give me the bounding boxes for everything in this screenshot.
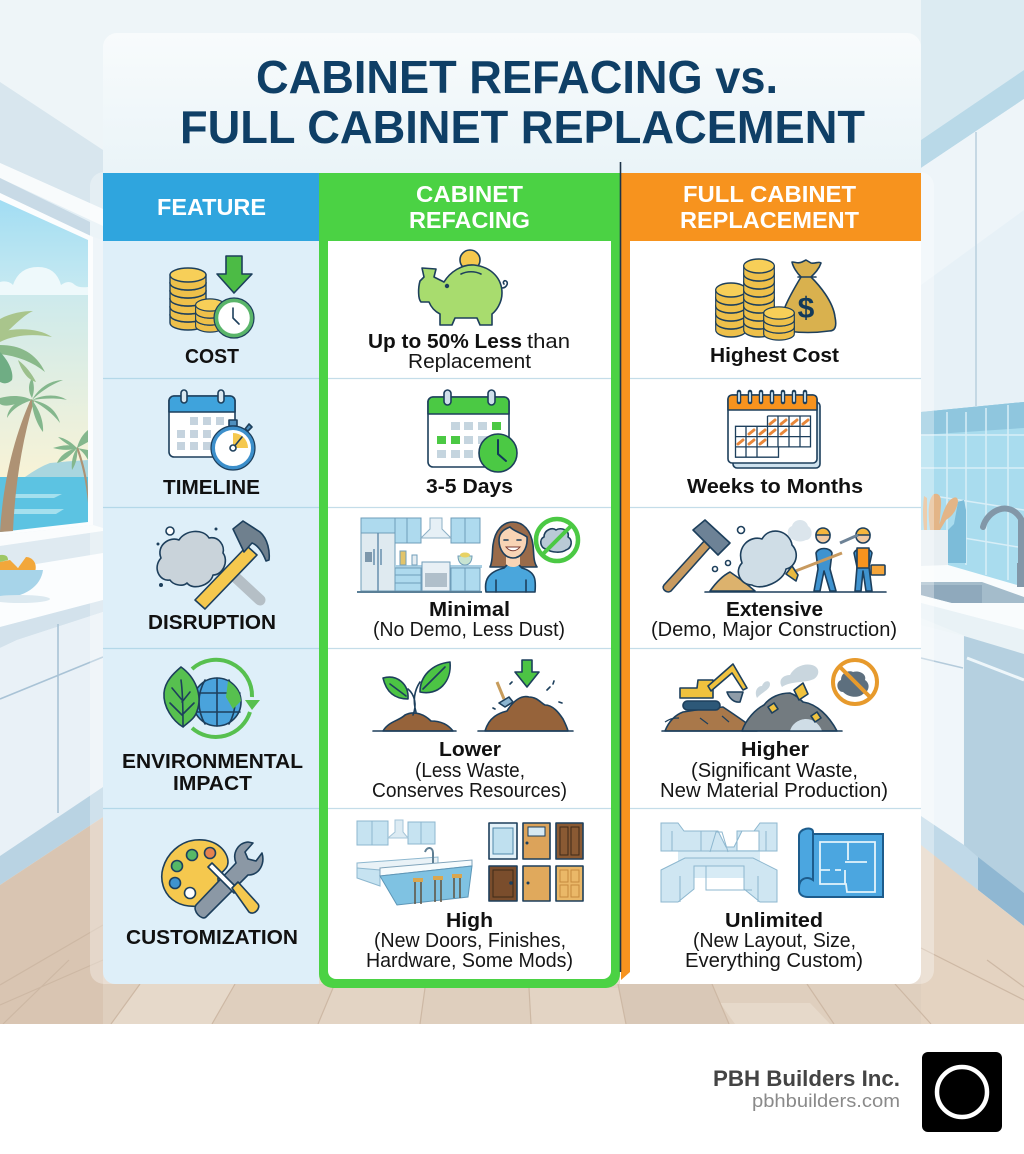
label: environmental impact: IMPACT xyxy=(173,773,252,795)
text: higher: New Material Production) xyxy=(660,780,888,802)
icon: coin stacks and money bag: $ xyxy=(798,292,815,325)
text: up to 50% less: than xyxy=(527,331,570,353)
faucet xyxy=(983,509,1024,587)
icon: excavator, debris and dust ban xyxy=(662,660,877,731)
refacing header: REFACING xyxy=(409,207,530,233)
replacement header xyxy=(621,173,921,241)
label: environmental impact: ENVIRONMENTAL xyxy=(122,751,303,773)
label: timeline: TIMELINE xyxy=(163,477,260,499)
text: higher: Higher xyxy=(741,739,809,761)
refacing header xyxy=(409,181,530,233)
replacement header: FULL CABINET xyxy=(683,181,856,207)
right wall xyxy=(921,70,1024,168)
text: unlimited xyxy=(685,910,863,972)
text: up to 50% less: Replacement xyxy=(408,351,531,373)
text: high: Hardware, Some Mods) xyxy=(366,950,573,972)
replacement header: REPLACEMENT xyxy=(680,207,859,233)
utensils xyxy=(921,494,966,568)
text: lower: Conserves Resources) xyxy=(372,780,567,802)
text: 3-5 days: 3-5 Days xyxy=(426,476,513,498)
text: up to 50% less: Up to 50% Less xyxy=(368,331,522,353)
column: feature xyxy=(103,173,319,984)
footer text: pbhbuilders.com xyxy=(752,1091,900,1111)
text: high: (New Doors, Finishes, xyxy=(374,930,566,952)
window view xyxy=(0,193,93,535)
translucent table backing panel xyxy=(90,172,934,984)
label: disruption: DISRUPTION xyxy=(148,612,276,634)
text: higher xyxy=(660,739,888,802)
label: environmental impact xyxy=(122,751,303,795)
icon: dust cloud and hammer xyxy=(156,521,269,609)
column: cabinet refacing xyxy=(319,173,620,988)
label: customization: CUSTOMIZATION xyxy=(126,927,298,949)
text: unlimited: Unlimited xyxy=(725,910,823,932)
icon: blueprint xyxy=(799,829,883,897)
feature header: FEATURE xyxy=(157,194,266,220)
text: high: High xyxy=(446,910,493,932)
text: up to 50% less xyxy=(368,331,570,373)
icon: palette and wrench xyxy=(162,840,263,918)
text: unlimited: (New Layout, Size, xyxy=(693,930,856,952)
refacing header: CABINET xyxy=(416,181,523,207)
icon: sprout and reduced waste pile xyxy=(373,660,573,731)
icon: u-shaped kitchen plan xyxy=(661,823,777,902)
title panel xyxy=(103,33,921,173)
icon: intact kitchen and smiling woman xyxy=(357,518,578,592)
icon: short calendar with clock xyxy=(428,390,517,472)
text: lower: (Less Waste, xyxy=(415,760,525,782)
fruit bowl xyxy=(0,555,50,603)
icon: door style samples xyxy=(489,823,583,901)
feature header xyxy=(103,173,319,241)
text: high xyxy=(366,910,573,972)
text: weeks to months: Weeks to Months xyxy=(687,476,863,498)
column: full cabinet replacement xyxy=(620,173,921,984)
text: higher: (Significant Waste, xyxy=(691,760,858,782)
text: lower xyxy=(372,739,567,802)
icon: coin stacks and money bag xyxy=(716,259,836,340)
icon: demolition with workers xyxy=(663,520,886,592)
text: extensive xyxy=(651,599,897,641)
label: cost: COST xyxy=(185,346,239,368)
text: extensive: (Demo, Major Construction) xyxy=(651,619,897,641)
text: lower: Lower xyxy=(439,739,501,761)
icon: leaf, globe and recycling arrows xyxy=(164,660,260,737)
title: CABINET REFACING vs. xyxy=(256,51,778,103)
text: extensive: Extensive xyxy=(726,599,823,621)
text: highest cost: Highest Cost xyxy=(710,345,839,367)
logo xyxy=(922,1052,1002,1132)
text: minimal: Minimal xyxy=(429,599,510,621)
text: unlimited: Everything Custom) xyxy=(685,950,863,972)
icon: calendar and stopwatch xyxy=(169,390,255,470)
center divider line xyxy=(620,162,622,972)
icon: kitchen island xyxy=(357,820,472,905)
title: FULL CABINET REPLACEMENT xyxy=(180,101,865,153)
icon: piggy bank xyxy=(419,250,507,325)
title xyxy=(180,51,865,153)
footer text xyxy=(713,1066,900,1111)
text: minimal: (No Demo, Less Dust) xyxy=(373,619,565,641)
icon: large calendar xyxy=(728,392,820,468)
footer xyxy=(0,1024,1024,1154)
text: minimal xyxy=(373,599,565,641)
footer text: PBH Builders Inc. xyxy=(713,1066,900,1091)
icon: coins, arrow and clock xyxy=(170,256,254,338)
